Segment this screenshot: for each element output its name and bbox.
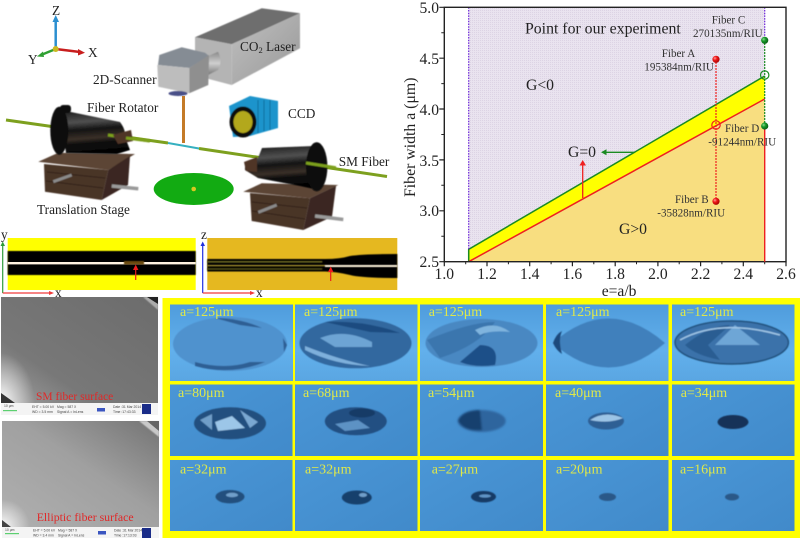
elliptic fiber caption: Elliptic fiber surface — [37, 510, 134, 524]
micrograph: a=40 µm: a=40μm — [555, 386, 602, 401]
red arrow to G equals 0 — [580, 160, 586, 198]
micrograph: a=125 µm, 4 — [546, 304, 668, 381]
micrograph: a=80 µm: a=80μm — [178, 386, 225, 401]
panel: experimental setup schematic — [6, 3, 390, 230]
panel: fiber side view in xy plane — [0, 227, 196, 300]
panel: SM fiber SEM image — [1, 297, 158, 415]
point: fiber A — [712, 56, 720, 63]
x axis tick labels: 1.6 — [563, 266, 582, 283]
panel: fiber side view in xz plane — [200, 227, 397, 300]
right translation stage — [243, 183, 343, 230]
SEM parameters: EHT = 5.00 kV — [33, 528, 56, 532]
y axis tick labels: 5.0 — [420, 0, 439, 17]
experiment note: Point for our experiment — [525, 20, 681, 38]
micrograph: a=125 µm, 4: a=125μm — [556, 305, 610, 320]
micrograph: a=54 µm: a=54μm — [428, 386, 475, 401]
SEM parameters: WD = 3.4 mm — [33, 534, 54, 538]
CCD label: CCD — [288, 106, 316, 121]
y axis tick labels: 2.5 — [420, 254, 439, 271]
red boundary line — [469, 99, 765, 262]
label: fiber B — [657, 194, 725, 220]
red arrow at taper — [328, 266, 333, 281]
SEM parameters: Time :17:13:03 — [114, 534, 137, 538]
micrograph: a=16 µm: a=16μm — [680, 462, 727, 478]
SEM parameters: Signal A = InLens — [57, 410, 84, 414]
purple limit lines — [469, 7, 765, 250]
region: G above 0 — [469, 99, 765, 262]
label: fiber B: Fiber B — [675, 194, 709, 206]
SEM parameters: Signal A = InLens — [58, 534, 85, 538]
optical fiber line — [6, 120, 387, 176]
label: fiber D: -91244nm/RIU — [708, 136, 776, 148]
z and x axes — [200, 227, 263, 300]
icon: XYZ coordinate axes: Z — [52, 3, 60, 18]
label: fiber C: Fiber C — [712, 14, 745, 26]
open marker on red line — [712, 121, 720, 129]
left fiber rotator — [50, 105, 150, 155]
label: fiber A: Fiber A — [662, 48, 695, 60]
right fiber rotator — [244, 142, 336, 191]
region label G equals 0: G=0 — [568, 144, 596, 161]
SEM parameters: Date :31 Mar 2014 — [114, 528, 142, 532]
micrograph: a=32 µm, 2 — [295, 460, 418, 531]
icon: CO2 laser box — [195, 8, 300, 85]
micrograph: a=32 µm, 1: a=32μm — [180, 462, 227, 478]
fiber rotator label: Fiber Rotator — [87, 100, 159, 115]
left translation stage — [38, 153, 138, 200]
micrograph: a=16 µm — [672, 460, 794, 531]
green boundary line — [469, 76, 765, 262]
green arrow to G equals 0 — [601, 149, 635, 155]
icon: XYZ coordinate axes: X — [88, 45, 98, 60]
SEM parameters: Mag = 587 X — [57, 405, 77, 409]
point: fiber C — [761, 37, 768, 44]
SEM parameters: 10 μm — [5, 528, 15, 532]
micrograph: a=80 µm — [170, 384, 292, 456]
SEM parameters: WD = 3.5 mm — [32, 410, 53, 414]
icon: CCD camera — [229, 96, 278, 138]
fiber C and D guide line — [764, 40, 766, 126]
micrograph: a=125 µm, 2 — [295, 304, 418, 381]
x axis tick labels — [435, 266, 796, 283]
2D scanner label: 2D-Scanner — [93, 72, 157, 87]
micrograph: a=32 µm, 1 — [170, 460, 292, 531]
micrograph: a=125 µm, 1: a=125μm — [180, 305, 234, 320]
micrograph: a=125 µm, 5: a=125μm — [680, 305, 734, 320]
SM fiber caption: SM fiber surface — [36, 391, 113, 403]
open marker on green line — [760, 71, 769, 79]
micrograph: a=125 µm, 2: a=125μm — [304, 305, 358, 320]
x axis tick labels: 2.2 — [691, 266, 710, 283]
micrograph: a=27 µm — [420, 460, 543, 531]
y axis tick labels: 3.0 — [420, 203, 439, 220]
CO2 laser label: 2 — [258, 45, 263, 55]
y axis tick labels — [420, 0, 439, 271]
z and x axes: z — [201, 227, 207, 242]
y axis tick labels: 4.5 — [420, 51, 439, 68]
micrograph: a=125 µm, 1 — [170, 304, 293, 381]
y and x axes — [0, 227, 62, 300]
micrograph: a=125 µm, 5 — [672, 304, 794, 381]
micrograph: a=20 µm: a=20μm — [556, 462, 603, 478]
point: fiber D — [761, 122, 768, 130]
translation stage label: Translation Stage — [37, 202, 130, 217]
panel: fiber cross-section micrographs — [162, 298, 800, 538]
region label G less than 0: G<0 — [526, 77, 554, 94]
z and x axes: x — [256, 285, 263, 300]
micrograph: a=125 µm, 3: a=125μm — [429, 305, 482, 320]
SEM parameters: Time :17:43:33 — [113, 410, 136, 414]
region: G equals 0 band — [469, 76, 765, 262]
x axis tick labels: 1.0 — [435, 266, 454, 283]
SEM parameters: 10 μm — [4, 404, 14, 408]
y and x axes: x — [55, 285, 62, 300]
point: fiber B — [712, 198, 720, 205]
x axis tick labels: 1.8 — [605, 266, 625, 283]
micrograph: a=34 µm: a=34μm — [681, 386, 727, 401]
label: fiber A — [644, 48, 714, 74]
micrograph: a=68 µm — [295, 384, 418, 456]
icon: 2D scanner — [157, 47, 209, 96]
y axis title: Fiber width a (μm) — [402, 78, 419, 197]
y and x axes: y — [1, 227, 8, 242]
micrograph: a=20 µm — [546, 460, 668, 531]
micrograph: a=40 µm — [546, 384, 668, 456]
label: fiber B: -35828nm/RIU — [657, 208, 725, 220]
micrograph: a=125 µm, 3 — [420, 304, 543, 381]
axes frame and ticks — [439, 7, 786, 266]
label: fiber D: Fiber D — [725, 123, 759, 135]
micrograph: a=27 µm: a=27μm — [432, 462, 478, 478]
label: fiber C — [693, 14, 763, 40]
micrograph: a=68 µm: a=68μm — [303, 386, 350, 401]
x axis tick labels: 1.4 — [520, 266, 540, 283]
panel: elliptic fiber SEM image — [2, 421, 159, 538]
icon: XYZ coordinate axes: Y — [28, 52, 38, 67]
x axis title: e=a/b — [602, 283, 637, 300]
elliptical green laser spot — [154, 173, 234, 205]
micrograph: a=32 µm, 2: a=32μm — [305, 462, 352, 478]
red arrow at taper — [133, 264, 138, 280]
region: G below 0 — [469, 7, 765, 249]
SEM parameters: Mag = 587 X — [58, 528, 78, 532]
y axis tick labels: 4.0 — [420, 102, 439, 119]
SEM parameters: EHT = 5.00 kV — [32, 405, 55, 409]
SM fiber label: SM Fiber — [339, 154, 390, 169]
x axis tick labels: 2.4 — [734, 266, 753, 283]
x axis tick labels: 2.0 — [648, 266, 668, 283]
region label G greater than 0: G>0 — [619, 221, 647, 238]
micrograph: a=54 µm — [420, 384, 543, 456]
micrograph: a=34 µm — [672, 384, 794, 456]
label: fiber A: 195384nm/RIU — [644, 62, 714, 74]
label: fiber C: 270135nm/RIU — [693, 28, 763, 40]
SEM parameters — [5, 528, 142, 538]
CO2 laser label: Laser — [263, 39, 296, 54]
icon: XYZ coordinate axes — [28, 3, 98, 67]
x axis tick labels: 2.6 — [776, 266, 796, 283]
chart: fiber width versus ellipticity — [402, 0, 796, 300]
x axis tick labels: 1.2 — [477, 266, 497, 283]
fiber A and B guide line — [715, 59, 717, 201]
laser beam — [182, 96, 185, 143]
label: fiber D — [708, 123, 776, 148]
SEM parameters — [4, 404, 141, 414]
CO2 laser label: CO — [240, 39, 258, 54]
y axis tick labels: 3.5 — [420, 153, 439, 170]
SEM parameters: Date :31 Mar 2014 — [113, 405, 141, 409]
red limit line — [764, 126, 766, 262]
